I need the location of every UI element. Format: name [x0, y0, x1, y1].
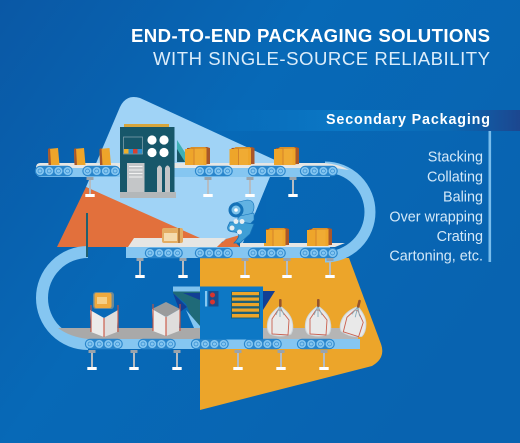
panel: orange wedge	[57, 187, 240, 247]
product: wrapped box	[162, 228, 183, 243]
title: END-TO-END PACKAGING SOLUTIONS	[131, 25, 490, 46]
list: secondary packaging processes: Stacking	[428, 150, 483, 166]
product: closed tote	[152, 302, 180, 336]
title	[131, 25, 490, 69]
panel: amber wedge	[200, 258, 382, 410]
conveyor: middle	[126, 235, 345, 278]
icon: robotic wrapping arm	[228, 177, 270, 243]
list: secondary packaging processes: Over wrapping	[389, 210, 483, 226]
product: filled tote with box	[90, 292, 118, 337]
products: collated cartons top row	[185, 147, 299, 165]
title: WITH SINGLE-SOURCE RELIABILITY	[153, 48, 490, 69]
list: secondary packaging processes: Collating	[427, 170, 483, 186]
conveyor: top with right curve	[35, 163, 370, 257]
machine: teal filling unit	[120, 124, 186, 198]
heading band background	[170, 110, 520, 131]
products: sealed sacks	[267, 297, 372, 339]
machine: blue baling press	[173, 286, 275, 340]
heading: Secondary Packaging: Secondary Packaging	[326, 112, 490, 128]
list: secondary packaging processes: Crating	[437, 229, 483, 245]
products: single bags	[48, 148, 111, 165]
panel: light blue wedge	[86, 97, 275, 243]
list: secondary packaging processes: Baling	[443, 190, 483, 206]
list: secondary packaging processes	[389, 131, 491, 264]
conveyor: bottom with left curve	[42, 213, 360, 370]
products: collated cartons middle row	[264, 228, 332, 246]
list: secondary packaging processes: Cartoning, etc.	[389, 248, 483, 264]
